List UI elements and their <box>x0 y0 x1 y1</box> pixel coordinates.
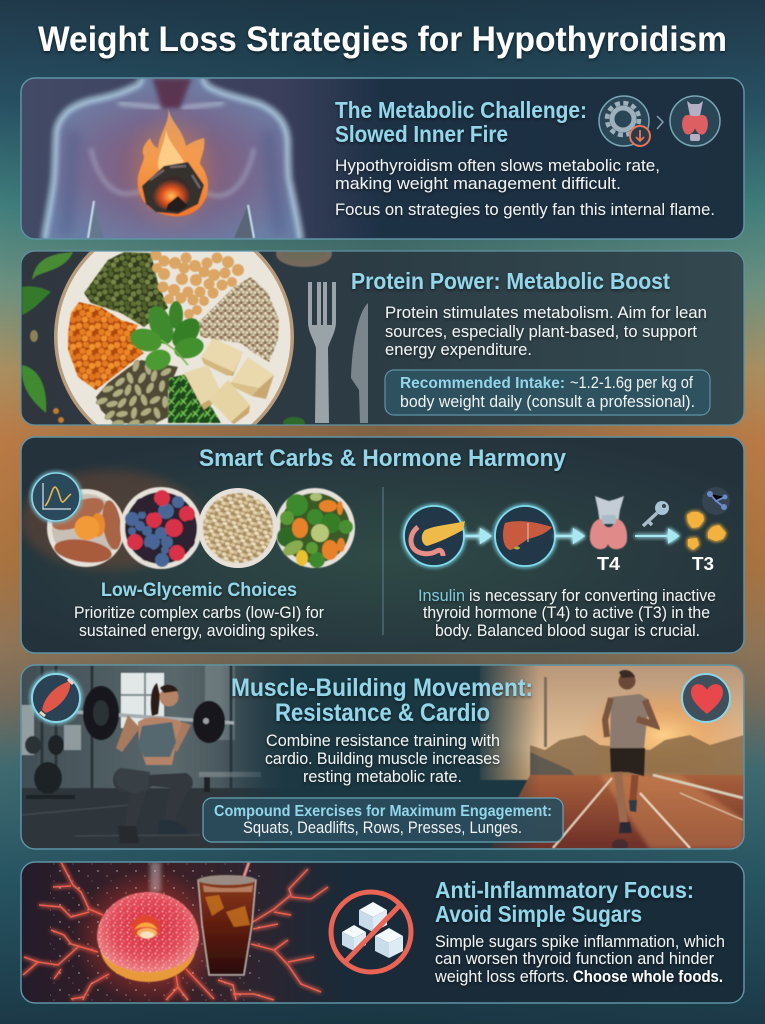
illustration: plant protein plate <box>22 252 368 424</box>
illustration: sugared donut <box>97 862 199 982</box>
body text: weight loss efforts. <box>434 968 569 986</box>
icon: no sugar <box>331 892 411 972</box>
heading: Smart Carbs & Hormone Harmony <box>199 445 567 472</box>
text: insulin: is necessary for converting inactive <box>469 587 716 605</box>
callout: recommended intake: body weight daily (consult a professional). <box>400 393 695 411</box>
heading: Avoid Simple Sugars <box>435 901 642 927</box>
panel: smart carbs and hormone harmony <box>20 437 744 653</box>
icon: key <box>643 501 669 526</box>
illustration: sunset track <box>480 665 748 849</box>
salad greens <box>168 373 221 423</box>
flame and coal <box>138 108 208 216</box>
arrow <box>555 530 583 542</box>
text: complex carbs <box>74 604 324 640</box>
body text <box>385 304 707 359</box>
icon: glycemic chart <box>32 473 80 521</box>
heading: Slowed Inner Fire <box>335 121 508 147</box>
callout: compound exercises: Squats, Deadlifts, Rows, Presses, Lunges. <box>243 819 522 837</box>
basil leaves <box>128 301 206 374</box>
body text: sources, especially plant-based, to support <box>385 323 697 341</box>
label T3: T3 <box>692 554 714 574</box>
body text: can worsen thyroid function and hinder <box>435 950 714 968</box>
bowl: vegetables <box>275 488 355 568</box>
figure: runner <box>605 670 655 851</box>
heading <box>231 674 533 727</box>
bowl: sweet potatoes <box>47 489 125 567</box>
body text: Protein stimulates metabolism. Aim for lean <box>385 304 707 322</box>
icon: thyroid T4 <box>590 496 627 549</box>
callout: recommended intake: Recommended Intake: <box>400 375 565 392</box>
icon: chevron <box>657 116 663 129</box>
label T4: T4 <box>597 554 620 574</box>
body text: resting metabolic rate. <box>303 768 462 786</box>
pumpkin seeds <box>96 360 178 424</box>
body text: energy expenditure. <box>385 341 532 359</box>
heading <box>435 877 694 927</box>
callout: recommended intake <box>385 370 710 415</box>
icon: heart <box>682 674 730 722</box>
text: insulin <box>418 587 716 640</box>
text: insulin: Insulin <box>418 587 465 605</box>
icon: muscle <box>32 674 80 722</box>
heading <box>335 97 587 147</box>
label: low-glycemic choices: Low-Glycemic Choices <box>101 580 297 601</box>
illustration: cola glass <box>198 862 256 975</box>
chickpeas <box>150 250 244 319</box>
panel: protein power <box>20 250 745 426</box>
icon: thyroid <box>670 96 720 146</box>
side leaves and bowl <box>22 241 332 429</box>
body text: Hypothyroidism often slows metabolic rate, <box>335 157 660 175</box>
heading: Resistance & Cardio <box>275 699 490 727</box>
body text <box>265 732 500 786</box>
panel: muscle-building movement <box>21 665 748 851</box>
heading: Protein Power: Metabolic Boost <box>351 268 670 294</box>
body text: making weight management difficult. <box>335 175 621 193</box>
body text: Simple sugars spike inflammation, which <box>435 933 725 951</box>
callout: compound exercises: Compound Exercises for Maximum Engagement: <box>214 803 552 820</box>
fork <box>308 282 336 423</box>
callout: recommended intake: ~1.2-1.6g per kg of <box>570 374 693 392</box>
green lentils <box>84 252 168 327</box>
title: Weight Loss Strategies for Hypothyroidism <box>38 20 727 59</box>
tofu cubes <box>184 338 274 424</box>
arrow <box>465 530 490 542</box>
panel: the metabolic challenge <box>21 78 744 240</box>
body text <box>434 933 725 986</box>
text: insulin: thyroid hormone (T4) to active (T3) in the <box>423 604 710 622</box>
body text <box>335 157 715 219</box>
body text: Combine resistance training with <box>266 732 500 750</box>
text: complex carbs: sustained energy, avoiding spikes. <box>79 622 319 640</box>
icon: pancreas <box>404 506 465 566</box>
callout: compound exercises <box>203 798 563 842</box>
icon: liver <box>495 506 555 566</box>
text: insulin: body. Balanced blood sugar is crucial. <box>435 622 700 640</box>
heading: The Metabolic Challenge: <box>335 97 587 123</box>
quinoa <box>198 277 279 362</box>
heading: Muscle-Building Movement: <box>231 674 533 702</box>
illustration: inflammation cracks <box>23 862 328 1000</box>
body text: Focus on strategies to gently fan this internal flame. <box>335 201 715 219</box>
arrow <box>635 530 678 542</box>
heading: Anti-Inflammatory Focus: <box>435 877 694 903</box>
bowl: oats <box>198 488 278 568</box>
illustration: gym <box>22 666 270 848</box>
text: complex carbs: Prioritize complex carbs (low-GI) for <box>74 604 324 622</box>
figure: woman squatting with barbell <box>76 683 234 843</box>
panel: anti-inflammatory focus <box>21 862 744 1005</box>
bowl: berries <box>120 487 202 569</box>
knife <box>351 303 368 423</box>
orange lentils <box>68 302 144 390</box>
body text: Choose whole foods. <box>573 968 723 986</box>
icon: gear with down arrow <box>599 96 650 146</box>
illustration: translucent torso with inner fire <box>44 78 301 240</box>
icon: active T3 molecules <box>687 487 730 550</box>
body text: cardio. Building muscle increases <box>265 750 500 768</box>
